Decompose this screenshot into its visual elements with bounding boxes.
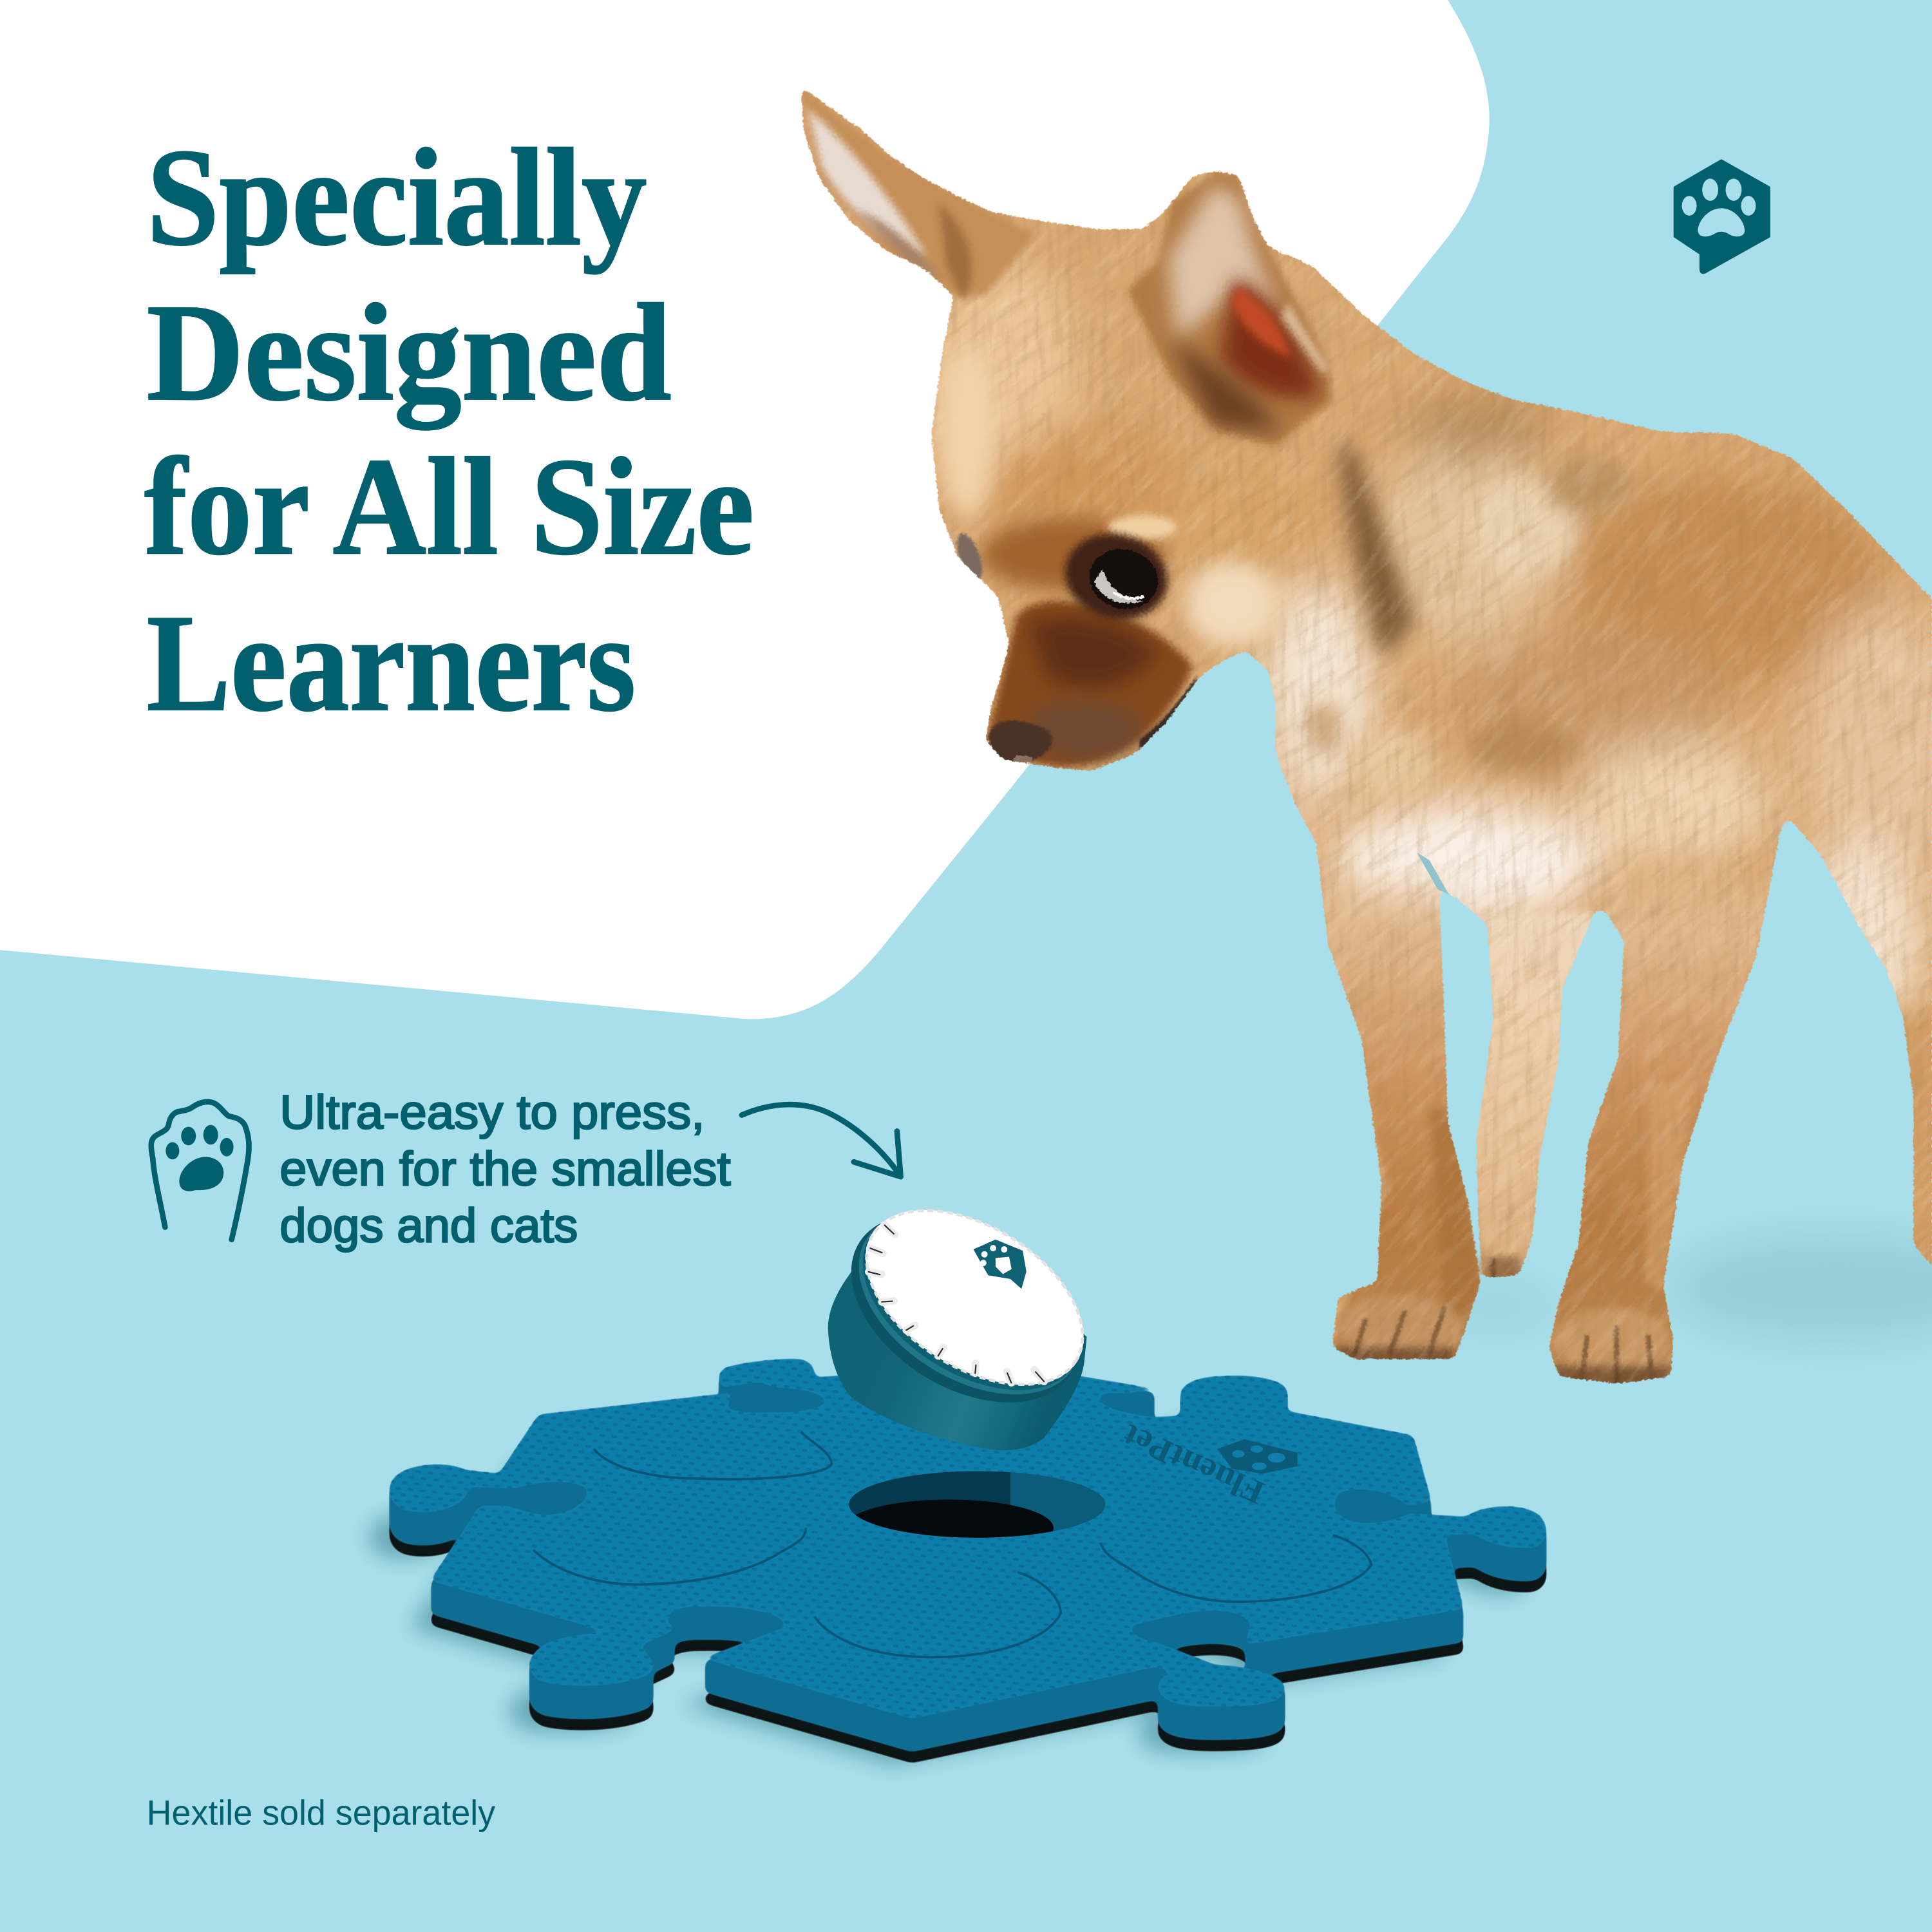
central hole: [844, 1466, 1109, 1556]
face: [938, 345, 1279, 766]
far ear: [1128, 171, 1331, 446]
far hind leg: [1891, 1010, 1932, 1282]
title: for All Size: [144, 429, 754, 583]
arrow: [742, 1104, 901, 1177]
tile logo: [1217, 1439, 1298, 1473]
paw toe lines: [1356, 1259, 1651, 1380]
shadow: tile on floor: [370, 1405, 1527, 1766]
button: [817, 1174, 1114, 1450]
eyes: [952, 523, 1177, 630]
fur streaks: [1294, 838, 1932, 1405]
leg colouring: [1306, 862, 1786, 1392]
footnote: Hextile sold separately: [147, 1794, 496, 1833]
title: Learners: [147, 585, 636, 740]
title: Specially: [147, 120, 647, 274]
icon: brand paw logo: [1674, 160, 1769, 273]
nose: [988, 721, 1052, 762]
paw-shaped lids: [533, 1432, 1371, 1657]
neck shading stripes: [1337, 444, 1414, 659]
title: [144, 120, 754, 740]
paw toes: [166, 1125, 234, 1191]
callout text: dogs and cats: [279, 1198, 578, 1253]
tile brand text: FluentPet: [1117, 1417, 1270, 1511]
left ear: [801, 86, 1035, 302]
button body: [828, 1232, 1087, 1450]
dog photo illustration: [800, 90, 1932, 1385]
panel: white headline shape: [0, 0, 1490, 1019]
button rings: [817, 1176, 1112, 1441]
callout text: [279, 1085, 731, 1253]
shadow: dog on floor: [1435, 1236, 1932, 1340]
button cap: [835, 1174, 1114, 1421]
title: Designed: [147, 275, 672, 430]
hextile puzzle toy: [370, 1343, 1565, 1763]
callout text: Ultra-easy to press,: [279, 1085, 705, 1139]
callout text: even for the smallest: [279, 1142, 731, 1196]
icon: button logo: [973, 1240, 1027, 1289]
blue gap under chest: [1417, 853, 1449, 895]
icon: paw outline: [151, 1102, 249, 1240]
